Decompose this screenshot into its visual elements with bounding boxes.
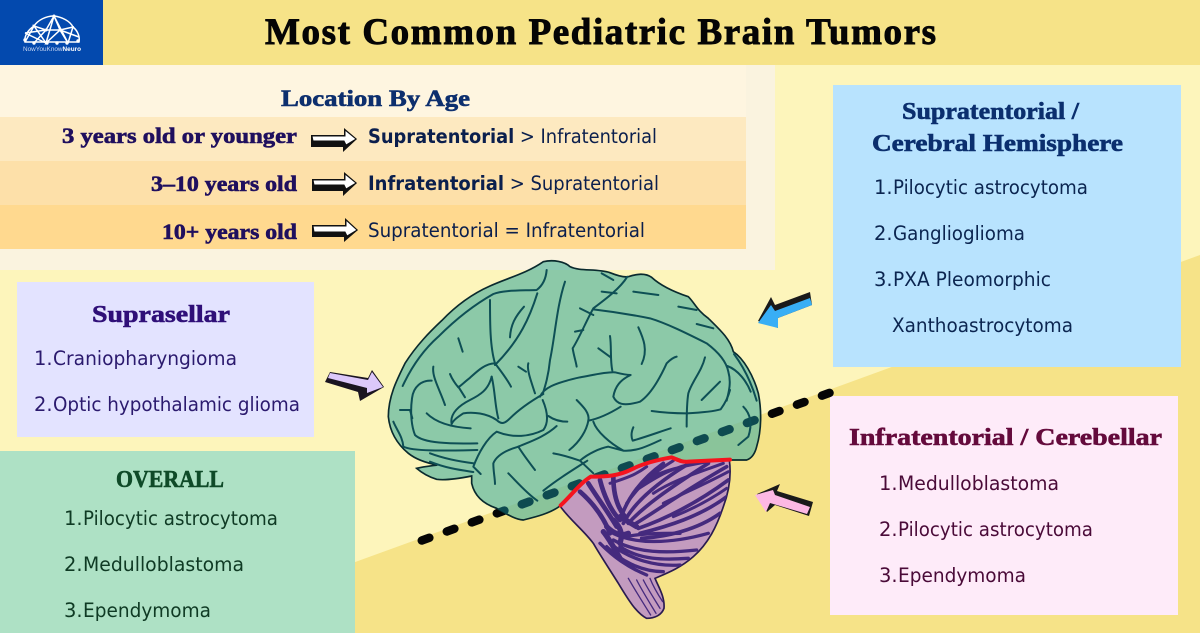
heading: suprasellar: Suprasellar [92, 302, 230, 328]
brain illustration [388, 260, 762, 620]
list: overall tumors: 2. [64, 553, 83, 576]
heading: supratentorial: Supratentorial / [902, 99, 1079, 125]
cerebrum [388, 261, 761, 520]
list: suprasellar tumors [34, 347, 300, 416]
row: 3-10 years old [151, 171, 659, 196]
panel: suprasellar [17, 282, 314, 437]
list: suprasellar tumors: 2. [34, 393, 53, 416]
list: infratentorial tumors [879, 472, 1093, 587]
heading: infratentorial: Infratentorial / Cerebellar [849, 425, 1162, 451]
row: 10+ years old: Supratentorial = Infratentorial [368, 219, 645, 242]
list: supratentorial tumors: Ganglioglioma [893, 222, 1025, 245]
sulci [393, 270, 757, 501]
list: supratentorial tumors: Pilocytic astrocytoma [893, 176, 1088, 199]
heading: overall: OVERALL [116, 467, 224, 493]
list: supratentorial tumors: 3. [874, 268, 893, 291]
arrow: supratentorial [758, 292, 812, 328]
logo: NowYouKnowNeuro [0, 0, 103, 65]
list: overall tumors: Ependymoma [83, 599, 211, 622]
list: suprasellar tumors: 1. [34, 347, 53, 370]
list: infratentorial tumors: Medulloblastoma [898, 472, 1059, 495]
dashed tentorium line [422, 392, 832, 540]
header band [0, 0, 1200, 65]
row: 10+ years old: 10+ years old [162, 219, 297, 244]
row: 10+ years old [162, 218, 645, 244]
list: overall tumors: 1. [64, 507, 83, 530]
panel: infratentorial [830, 396, 1178, 615]
list: infratentorial tumors: Pilocytic astrocytoma [898, 518, 1093, 541]
panel: supratentorial [833, 85, 1181, 367]
list: supratentorial tumors [874, 176, 1088, 337]
row: 3-10 years old: 3–10 years old [151, 171, 297, 196]
list: overall tumors: Pilocytic astrocytoma [83, 507, 278, 530]
logo: NowYouKnowNeuro: NowYouKnowNeuro [23, 46, 81, 53]
list: overall tumors: Medulloblastoma [83, 553, 244, 576]
list: infratentorial tumors: Ependymoma [898, 564, 1026, 587]
panel: overall [0, 451, 355, 633]
list: supratentorial tumors: PXA Pleomorphic [893, 268, 1051, 291]
row: 3-10 years old: Infratentorial > Supratentorial [368, 172, 659, 195]
row: 3 years old or younger: Supratentorial > Infratentorial [368, 125, 657, 148]
list: overall tumors [64, 507, 278, 622]
list: infratentorial tumors: 1. [879, 472, 898, 495]
row: 3 years old or younger: 3 years old or younger [62, 123, 297, 148]
heading: location by age: Location By Age [281, 86, 470, 111]
title: Most Common Pediatric Brain Tumors [265, 12, 936, 53]
list: infratentorial tumors: 2. [879, 518, 898, 541]
cerebellum [560, 457, 730, 618]
heading: cerebral hemisphere: Cerebral Hemisphere [872, 131, 1123, 157]
list: infratentorial tumors: 3. [879, 564, 898, 587]
list: suprasellar tumors: Craniopharyngioma [53, 347, 237, 370]
arrow: suprasellar [325, 370, 384, 401]
list: supratentorial tumors: 2. [874, 222, 893, 245]
list: overall tumors: 3. [64, 599, 83, 622]
red boundary line [561, 457, 730, 505]
list: supratentorial tumors: Xanthoastrocytoma [892, 314, 1073, 337]
list: suprasellar tumors: Optic hypothalamic glioma [53, 393, 300, 416]
arrow: infratentorial [755, 484, 813, 516]
dashes seen through cerebrum [498, 416, 759, 514]
panel: location by age [0, 65, 775, 270]
row: 3 years old or younger [62, 123, 657, 152]
list: supratentorial tumors: 1. [874, 176, 893, 199]
